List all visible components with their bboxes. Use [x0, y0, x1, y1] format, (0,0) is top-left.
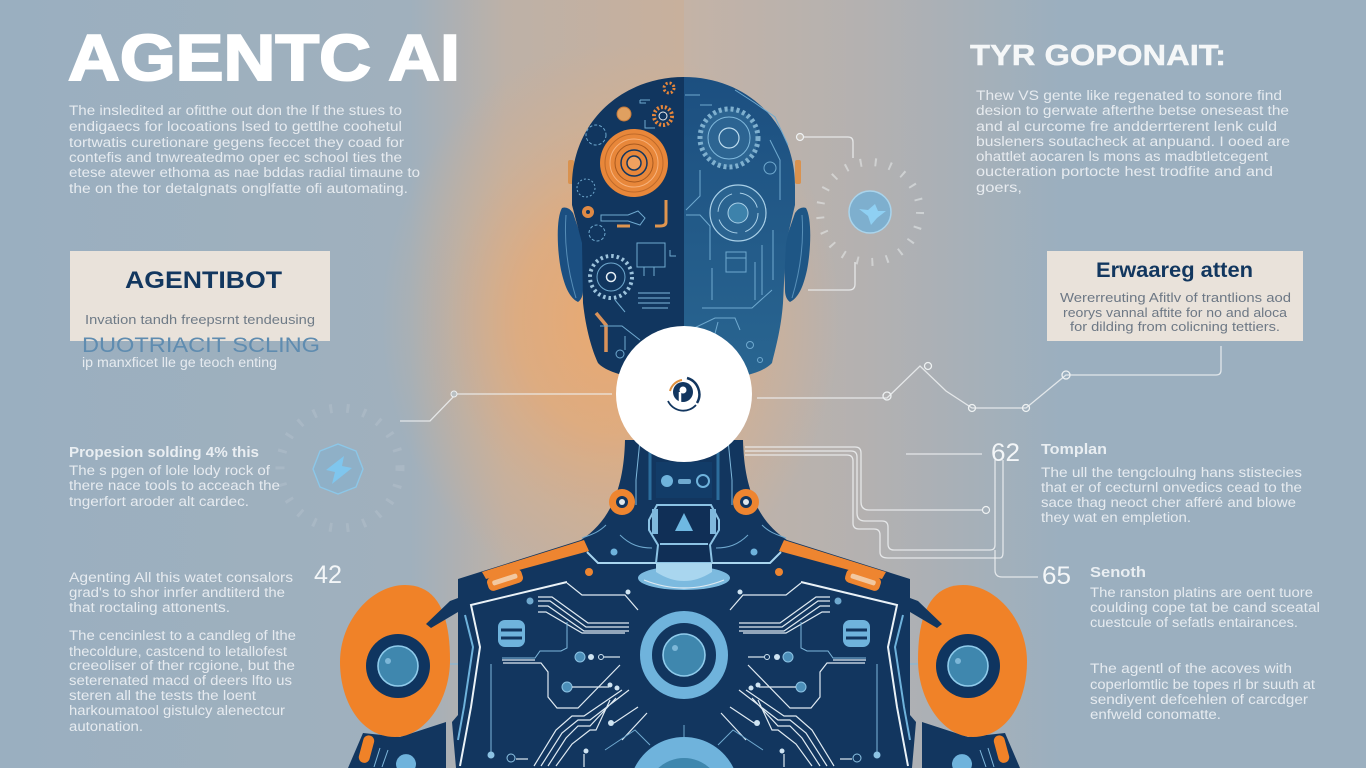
heading: Senoth	[1090, 565, 1146, 581]
heading: Tomplan	[1041, 442, 1107, 458]
robot: neck detail	[636, 440, 732, 590]
body: there nace tools to acceach the	[69, 478, 280, 493]
body: sace thag neoct cher afferé and blowe	[1041, 495, 1296, 510]
left text: bottom paragraph: steren all the tests the loent	[69, 688, 256, 703]
right text: senoth	[1090, 565, 1320, 630]
body: cuestcule of sefatls entairances.	[1090, 615, 1298, 630]
panel text	[1060, 291, 1291, 334]
body: coulding cope tat be cand sceatal	[1090, 600, 1320, 615]
robot: orange shoulder right	[910, 585, 1027, 737]
right text: bottom paragraph: The agentl of the acoves with	[1090, 661, 1292, 676]
intro text right	[976, 88, 1290, 195]
right text: bottom paragraph: enfweld conomatte.	[1090, 707, 1221, 722]
robot: lower core	[634, 725, 734, 768]
panel: erwaareg atten	[1047, 251, 1303, 341]
body	[69, 463, 280, 509]
robot: chest core	[646, 617, 722, 693]
intro text right: and al curcome fre andderrterent lenk culd	[976, 119, 1277, 134]
head: orange dial	[600, 129, 668, 197]
intro text right: oucteration portocte hest trodfite and and	[976, 164, 1273, 179]
left text: propesion	[69, 445, 280, 509]
intro text left: contefis and tnwreatedmo oper ec school ties the	[69, 150, 402, 165]
subheading: duotriacit scling: DUOTRIACIT SCLING	[82, 334, 320, 357]
icon: energy node left	[280, 408, 400, 528]
connector lines: neck to right labels	[745, 447, 1038, 577]
body: tngerfort aroder alt cardec.	[69, 494, 249, 509]
body	[1041, 465, 1302, 525]
intro text left: the on the tor detalgnats onglfatte ofi automating.	[69, 181, 408, 196]
intro text left: endigaecs for locoations lsed to gettlhe coohetul	[69, 119, 402, 134]
icon: network node right	[820, 162, 920, 262]
panel heading: AGENTIBOT	[125, 267, 282, 294]
title: AGENTC AI	[68, 21, 460, 94]
head: right gears and circuits	[685, 90, 788, 362]
intro text left: The insledited ar ofitthe out don the lf the stues to	[69, 103, 402, 118]
panel text: Invation tandh freepsrnt tendeusing	[85, 312, 315, 327]
robot: head	[572, 77, 795, 375]
panel: agentibot	[70, 251, 330, 341]
caption under panel: ip manxficet lle ge teoch enting	[82, 355, 277, 370]
panel text: Wererreuting Afitlv of trantlions aod	[1060, 291, 1291, 305]
heading right: TYR GOPONAIT:	[970, 40, 1226, 72]
intro text left: etese atewer ethoma as nae bddas radial timaune to	[69, 165, 420, 180]
robot: torso circuits right	[712, 525, 910, 767]
head: small orange gears	[582, 83, 674, 352]
robot: arms left	[348, 722, 446, 768]
right text: bottom paragraph: sendiyent defcehlen of carcdger	[1090, 692, 1309, 707]
left text: bottom paragraph: thecoldure, castcend to letallofest	[69, 644, 287, 659]
robot illustration	[340, 70, 1027, 768]
panel text: for dilding from colicning tettiers.	[1070, 320, 1280, 334]
body: they wat en empletion.	[1041, 510, 1191, 525]
left text: bottom paragraph: The cencinlest to a candleg of lthe	[69, 628, 296, 643]
left text: bottom paragraph: harkoumatool gistulcy alenectcur	[69, 703, 286, 718]
connector lines: right of head	[400, 134, 1221, 421]
panel heading: Erwaareg atten	[1096, 259, 1253, 282]
body: The ranston platins are oent tuore	[1090, 585, 1313, 600]
intro text right: desion to gerwate afterthe betse oneseast the	[976, 103, 1289, 118]
robot: neck and torso	[452, 440, 916, 768]
number 42: 42	[314, 561, 342, 589]
left text: bottom paragraph: creeoliser of ther rcgione, but the	[69, 658, 295, 673]
robot: orange neck bolts	[609, 489, 759, 515]
robot: orange shoulder left	[340, 585, 458, 737]
intro text right: ohattlet aocaren ls mons as madbtletcegent	[976, 149, 1268, 164]
left text: bottom paragraph: seterenated macd of deers lfto us	[69, 673, 292, 688]
body: that er of cecturnl onvedics cead to the	[1041, 480, 1302, 495]
icon: logo	[668, 378, 699, 411]
heading: Propesion solding 4% this	[69, 445, 259, 461]
intro text left: tortwatis curetionare gegens feccet they coad for	[69, 135, 405, 150]
left text: bottom paragraph	[69, 628, 296, 734]
right text: bottom paragraph: coperlomtlic be topes rl br suuth at	[1090, 677, 1315, 692]
intro text right: busleners soutacheck at anpuand. I ooed are	[976, 134, 1290, 149]
right text: tomplan	[1041, 442, 1302, 525]
robot: torso circuits left	[458, 525, 656, 767]
intro text left	[69, 103, 420, 196]
robot: arms right	[922, 722, 1020, 768]
panel text: reorys vannal aftite for no and aloca	[1063, 306, 1287, 320]
left text: bottom paragraph: autonation.	[69, 719, 143, 734]
white circle with logo	[616, 326, 752, 462]
number 65: 65	[1042, 562, 1071, 590]
left text: agenting: that roctaling attonents.	[69, 600, 230, 615]
right text: bottom paragraph	[1090, 661, 1315, 722]
body: The s pgen of lole lody rock of	[69, 463, 270, 478]
intro text right: Thew VS gente like regenated to sonore find	[976, 88, 1282, 103]
body	[1090, 585, 1320, 630]
left text: agenting: grad's to shor inrfer andtiterd the	[69, 585, 285, 600]
head: left gears and circuits	[577, 100, 676, 358]
body: The ull the tengcloulng hans stistecies	[1041, 465, 1302, 480]
number 62: 62	[991, 439, 1020, 467]
left text: agenting	[69, 570, 293, 615]
intro text right: goers,	[976, 180, 1022, 195]
robot: shoulder strips	[482, 540, 886, 579]
left text: agenting: Agenting All this watet consalors	[69, 570, 293, 585]
robot: ears	[558, 160, 810, 302]
